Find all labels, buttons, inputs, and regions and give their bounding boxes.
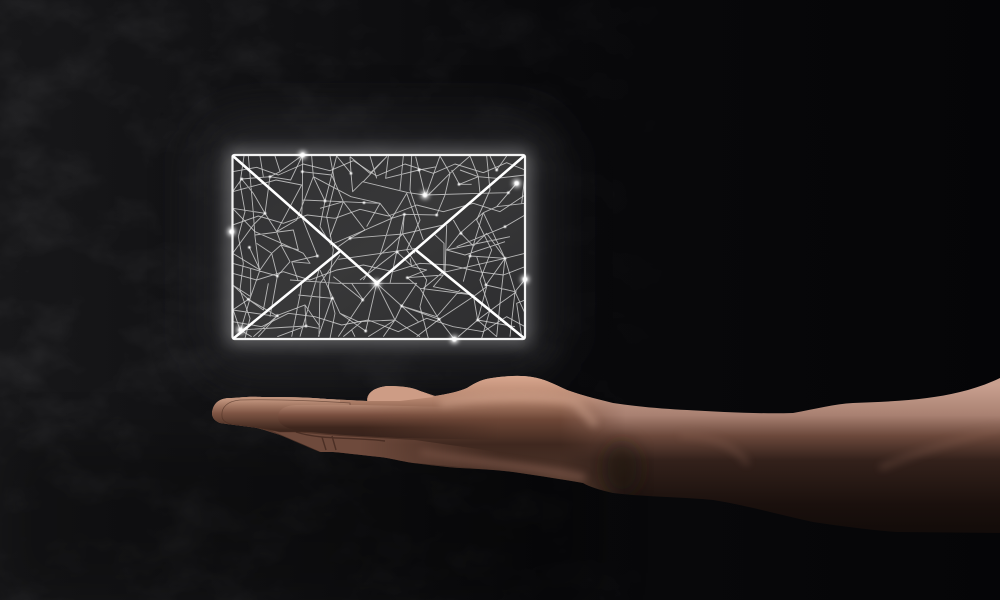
forearm muscle highlight — [718, 442, 954, 470]
wrist shadow — [602, 434, 640, 484]
underside of fingers — [272, 430, 474, 467]
back finger — [214, 397, 340, 424]
middle finger — [222, 400, 350, 432]
envelope outline — [232, 155, 525, 339]
front finger and palm fold — [282, 405, 466, 438]
envelope body — [232, 155, 525, 339]
envelope icon — [228, 151, 529, 343]
lit knuckle edge — [440, 397, 596, 425]
envelope flap and fold lines — [233, 156, 524, 338]
glowing network nodes — [228, 151, 529, 343]
open hand and forearm — [212, 376, 1000, 533]
additional mesh strands — [233, 161, 525, 332]
polygon network mesh — [233, 155, 525, 339]
thumb — [368, 386, 434, 401]
underside light on palm — [420, 452, 585, 478]
palm — [212, 376, 614, 493]
dark wrinkled backdrop — [0, 0, 525, 600]
envelope glow halo — [200, 118, 560, 376]
finger fold lines — [296, 432, 385, 450]
forearm — [200, 370, 1000, 540]
